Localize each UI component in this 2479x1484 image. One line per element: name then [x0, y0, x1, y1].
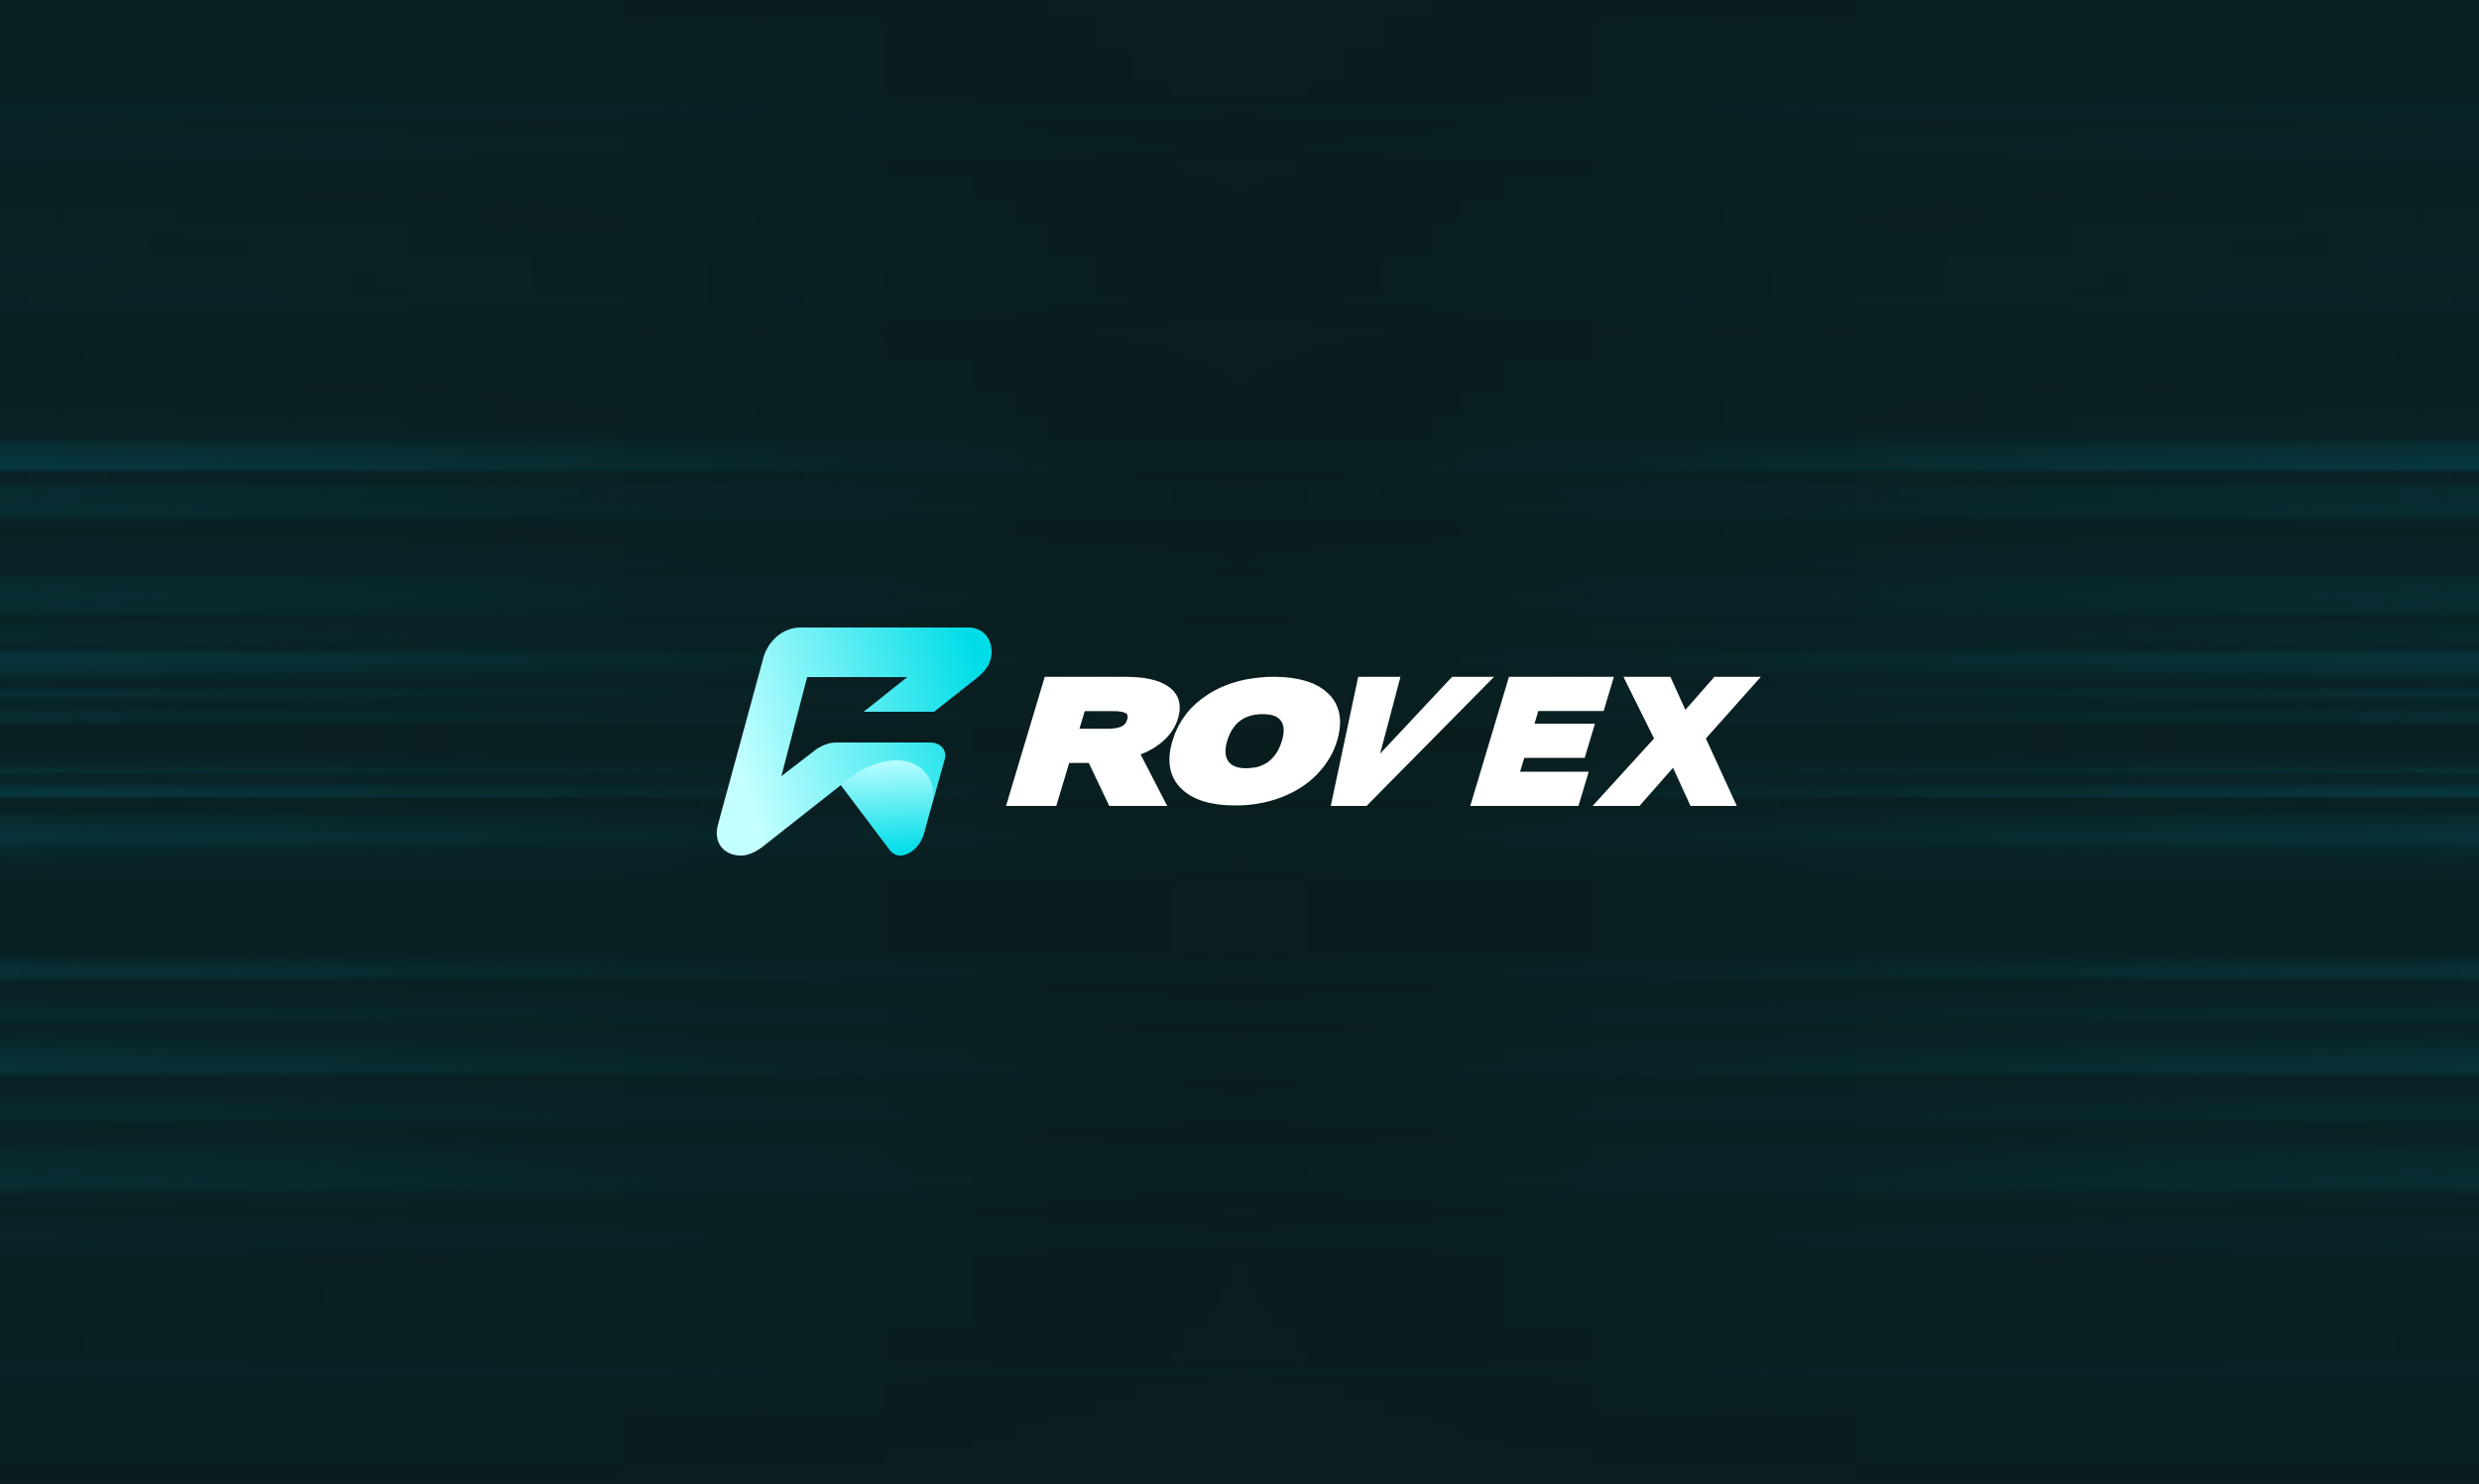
- icon: main ribbon: [717, 628, 992, 856]
- icon: folded tip: [841, 760, 933, 856]
- wordmark: ROVEX: O: [1151, 655, 1358, 827]
- icon: stylised R emblem: [717, 628, 992, 856]
- wordmark: ROVEX: E: [1459, 648, 1624, 833]
- wordmark: ROVEX: X: [1600, 649, 1756, 834]
- wordmark: ROVEX: [994, 647, 1756, 835]
- wordmark: ROVEX: V: [1272, 647, 1502, 835]
- wordmark: ROVEX: R: [994, 648, 1200, 833]
